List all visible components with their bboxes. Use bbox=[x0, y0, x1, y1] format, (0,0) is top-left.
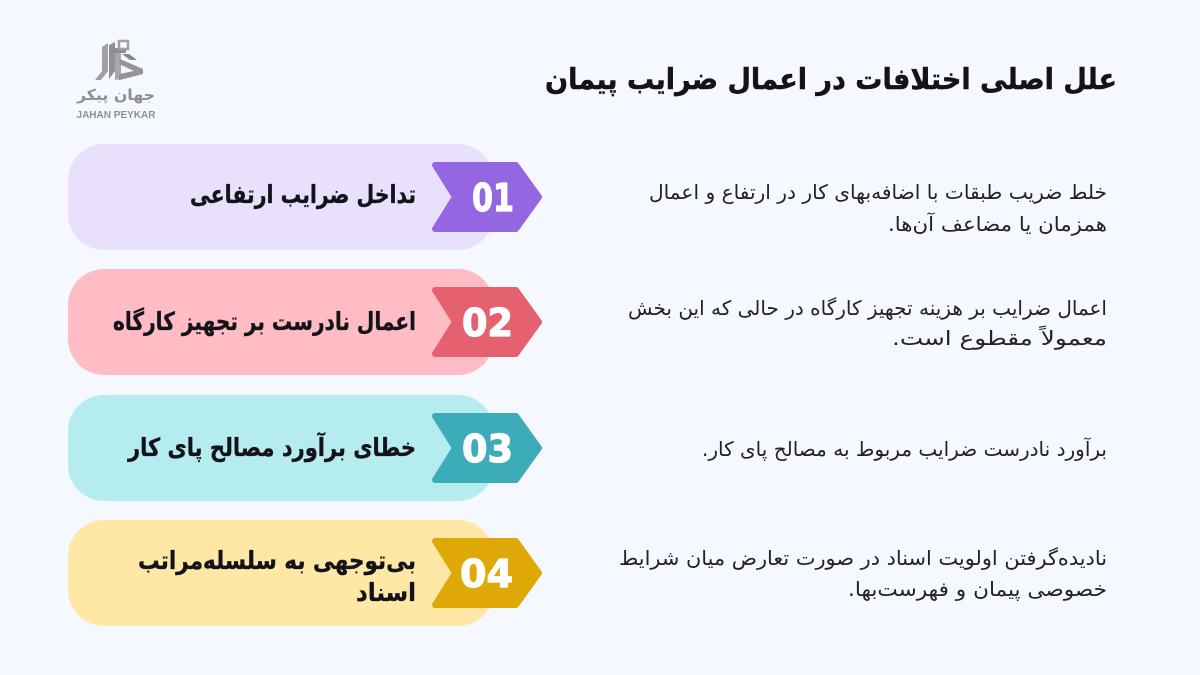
arrow badge bbox=[435, 416, 539, 480]
panel: row 2 bbox=[68, 269, 1107, 375]
description: معمولاً مقطوع است. bbox=[892, 325, 1107, 350]
logo persian name: جهان پیکر bbox=[76, 86, 155, 105]
heading: بی‌توجهی به سلسله‌مراتب bbox=[138, 546, 416, 576]
description: همزمان یا مضاعف آن‌ها. bbox=[888, 211, 1107, 236]
arrow badge bbox=[435, 541, 539, 605]
number: 01 bbox=[472, 176, 514, 220]
panel: row 4 bbox=[68, 520, 1107, 626]
arrow badge bbox=[435, 165, 539, 229]
number: 03 bbox=[462, 427, 513, 471]
pill bbox=[68, 395, 494, 501]
description bbox=[619, 546, 1107, 602]
logo latin name: JAHAN PEYKAR bbox=[76, 109, 156, 121]
description: اعمال ضرایب بر هزینه تجهیز کارگاه در حالی که این بخش bbox=[628, 296, 1107, 320]
description: خلط ضریب طبقات با اضافه‌بهای کار در ارتفاع و اعمال bbox=[649, 180, 1107, 204]
pill bbox=[68, 144, 494, 250]
heading bbox=[138, 546, 416, 607]
panel: row 1 bbox=[68, 144, 1107, 250]
panel: row 3 bbox=[68, 395, 1107, 501]
number: 02 bbox=[462, 301, 513, 345]
arrow badge bbox=[435, 290, 539, 354]
heading: تداخل ضرایب ارتفاعی bbox=[190, 180, 416, 210]
icon: logo mark bbox=[95, 41, 143, 80]
description bbox=[649, 180, 1107, 236]
title: علل اصلی اختلافات در اعمال ضرایب پیمان bbox=[545, 62, 1117, 97]
pill bbox=[68, 520, 494, 626]
description: نادیده‌گرفتن اولویت اسناد در صورت تعارض میان شرایط bbox=[619, 546, 1107, 570]
description bbox=[628, 296, 1107, 350]
pill bbox=[68, 269, 494, 375]
number: 04 bbox=[460, 552, 513, 596]
heading: اسناد bbox=[356, 578, 416, 607]
logo bbox=[76, 41, 156, 121]
heading: خطای برآورد مصالح پای کار bbox=[126, 432, 416, 463]
description: برآورد نادرست ضرایب مربوط به مصالح پای کار. bbox=[702, 436, 1107, 462]
description: خصوصی پیمان و فهرست‌بها. bbox=[848, 577, 1107, 602]
heading: اعمال نادرست بر تجهیز کارگاه bbox=[113, 307, 416, 337]
